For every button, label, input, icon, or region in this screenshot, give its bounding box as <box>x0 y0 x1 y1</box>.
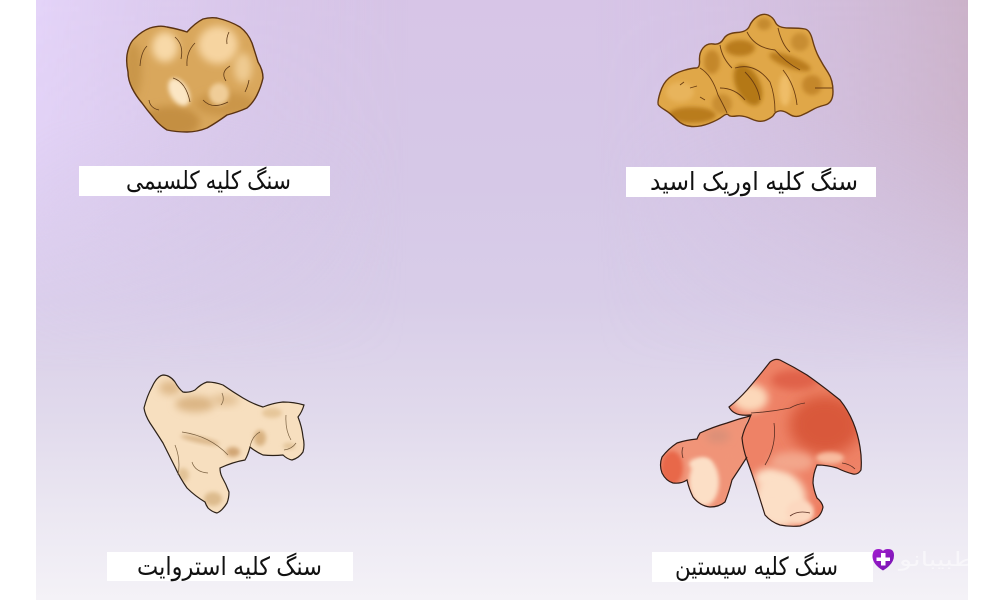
panel: struvite stone <box>107 370 353 582</box>
icon: struvite stone <box>140 370 310 518</box>
panel: uric acid stone <box>626 8 876 197</box>
label: cystine stone: سنگ کلیه سیستین <box>675 552 838 581</box>
panel: calcium stone <box>79 12 330 196</box>
label: calcium stone: سنگ کلیه کلسیمی <box>126 166 291 195</box>
logo: heart with cross and faint wordmark: طبیبانو <box>898 549 975 571</box>
icon: uric acid stone <box>657 14 834 128</box>
icon: calcium stone <box>126 17 264 133</box>
panel: cystine stone <box>652 355 873 582</box>
label: struvite stone: سنگ کلیه استروایت <box>137 552 322 582</box>
icon: cystine stone <box>655 355 865 530</box>
label: uric acid stone: سنگ کلیه اوریک اسید <box>650 167 858 197</box>
logo: heart with cross and faint wordmark <box>872 549 975 571</box>
